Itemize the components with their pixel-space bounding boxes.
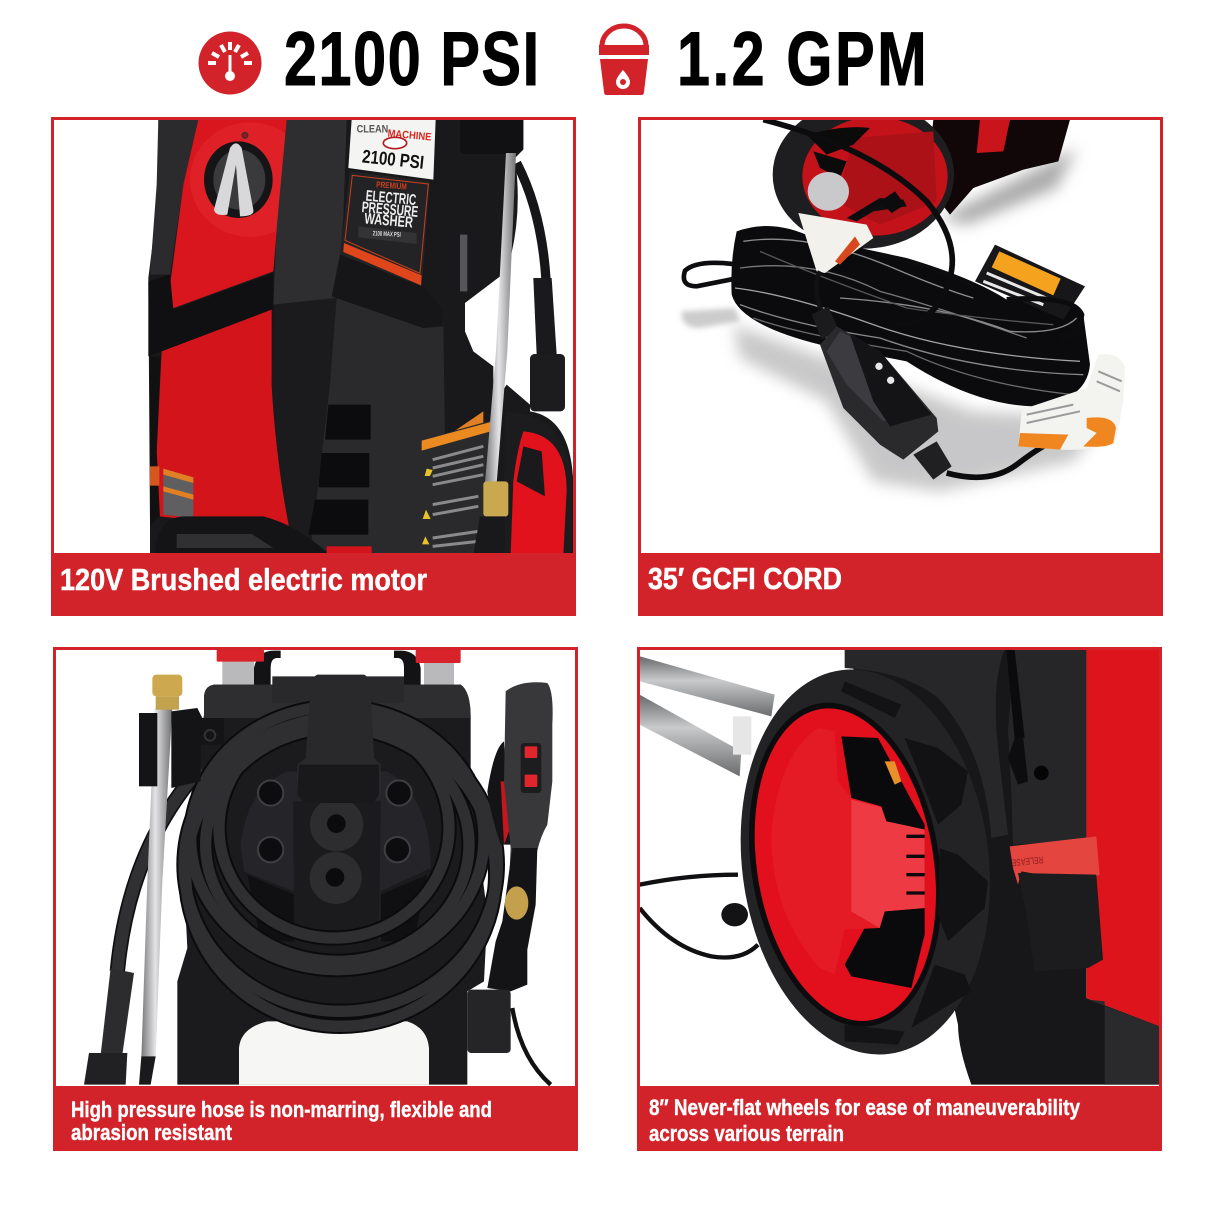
- panel: cord: [638, 101, 1163, 616]
- photo: hose reel rear view: [84, 650, 553, 1085]
- caption text: High pressure hose is non-marring, flexible and: [71, 1097, 492, 1122]
- photo: never-flat wheel close-up: [640, 650, 1160, 1085]
- caption text: across various terrain: [649, 1121, 844, 1146]
- label: product badge: PREMIUM: [376, 179, 407, 191]
- title: 2100 PSI: 2100 PSI: [284, 17, 539, 102]
- title: 1.2 GPM: 1.2 GPM: [677, 17, 927, 102]
- caption bar: [637, 1086, 1162, 1151]
- label: product badge: [340, 120, 436, 286]
- caption bar: [638, 553, 1163, 616]
- photo: never-flat wheel close-up: RELEASE: [1011, 853, 1044, 868]
- photo: GFCI cord coil: [682, 101, 1125, 491]
- caption text: [649, 1095, 1081, 1146]
- caption text: 35′ GCFI CORD: [648, 561, 842, 596]
- panel: wheels: [637, 648, 1162, 1151]
- header specs: [198, 17, 927, 102]
- caption text: [71, 1097, 492, 1145]
- label: product badge: 2100 PSI: [361, 145, 425, 173]
- caption bar: [53, 1086, 578, 1151]
- caption bar: [51, 553, 576, 616]
- label: product badge: WASHER: [364, 210, 414, 232]
- panel: motor: [51, 118, 576, 616]
- warning tag: [975, 245, 1085, 320]
- label: product badge: 2100 MAX PSI: [373, 230, 401, 239]
- label: product badge: CLEAN: [357, 124, 388, 136]
- icon: bucket: [599, 26, 649, 95]
- panel: hose: [53, 648, 578, 1151]
- icon: pressure gauge: [198, 32, 262, 94]
- caption text: 120V Brushed electric motor: [60, 562, 427, 597]
- caption text: abrasion resistant: [71, 1120, 233, 1145]
- label: product badge: ELECTRIC: [365, 188, 417, 209]
- photo: pressure washer front: [148, 120, 573, 555]
- label: product badge: MACHINE: [387, 128, 432, 143]
- label: product badge: PRESSURE: [361, 199, 419, 221]
- caption text: 8″ Never-flat wheels for ease of maneuverability: [649, 1095, 1081, 1120]
